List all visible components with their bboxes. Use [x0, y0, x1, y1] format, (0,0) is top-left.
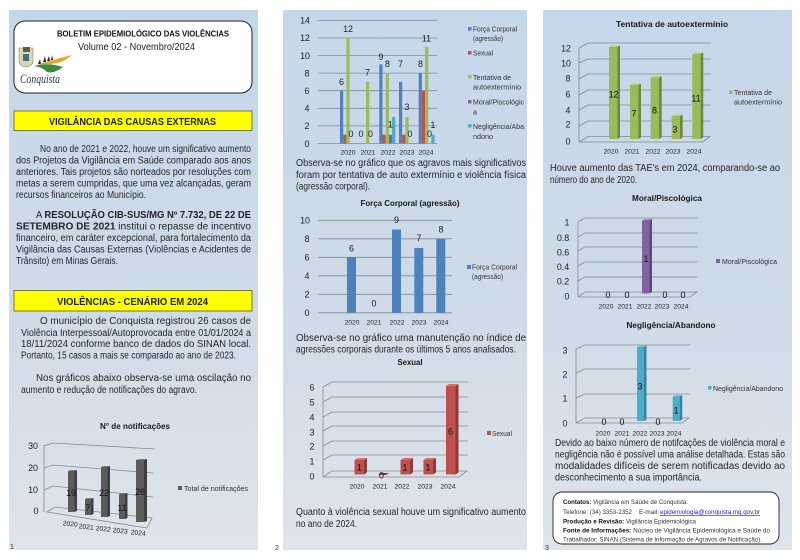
chart: agravos grouped bars: 1 — [388, 120, 393, 130]
chart: força corporal: 4 — [305, 271, 310, 281]
chart: sexual: 0 — [379, 470, 384, 480]
chart: negligência: 3 — [638, 382, 643, 392]
page number 3: 3 — [545, 545, 549, 552]
chart: negligência: 2 — [563, 370, 568, 380]
chart: tentativa: 7 — [632, 108, 637, 118]
chart: força corporal: 0 — [372, 298, 377, 308]
chart: moral: 0.4 — [557, 262, 569, 272]
chart: sexual: 2022 — [395, 484, 410, 490]
text block: oscilação — [21, 373, 251, 396]
chart: moral: 2024 — [674, 304, 689, 310]
text block: projetos: dos Projetos da Vigilância em Saúde comparado aos anos — [16, 156, 251, 166]
chart: agravos grouped bars: 2024 — [419, 150, 434, 156]
chart: total de notificações: 2020 — [62, 520, 78, 529]
chart: moral: 0.2 — [557, 276, 569, 286]
chart: agravos grouped bars — [300, 16, 524, 156]
text block: TAE: Houve aumento das TAE's em 2024, comparando-se ao — [550, 163, 780, 174]
legend: agravos: Força Corporal — [473, 24, 517, 34]
text block: projetos: recursos financeiros ao Município. — [16, 190, 146, 201]
text block: resolução — [16, 210, 252, 267]
chart: negligência: 0 — [656, 417, 661, 427]
chart: negligência: 2020 — [596, 430, 611, 438]
chart: sexual: 3 — [310, 428, 315, 438]
text block: projetos: anteriores. Tais projetos são norteados por resoluções com — [16, 167, 251, 178]
legend: agravos: (agressão) — [473, 34, 503, 43]
legend: agravos: Moral/Piscológic — [473, 98, 524, 106]
legend: sexual: Sexual — [492, 429, 512, 438]
chart: negligência: 1 — [563, 394, 568, 404]
text block: agravos: (agressão corporal). — [296, 182, 370, 192]
chart: negligência: 2024 — [667, 430, 682, 438]
chart: agravos grouped bars: 8 — [305, 68, 310, 78]
chart: agravos grouped bars: 12 — [343, 24, 353, 34]
chart: total de notificações: 30 — [28, 441, 38, 451]
text block: TAE: número do ano de 2020. — [550, 175, 637, 186]
chart: total de notificações: 2022 — [95, 525, 111, 534]
legend: tentativa: Tentativa de — [734, 88, 772, 97]
page number 2: 2 — [275, 545, 279, 552]
chart: sexual — [310, 382, 512, 490]
chart: agravos grouped bars: 11 — [422, 34, 431, 44]
chart: moral: 0.6 — [557, 248, 569, 258]
text block: oscilação: Nos gráficos abaixo observa-se uma oscilação no — [36, 373, 251, 384]
chart: tentativa: 0 — [566, 136, 571, 146]
contact box: E-mail: — [639, 509, 659, 516]
text block: projetos: metas a serem cumpridas, que uma vez alcançadas, geram — [16, 178, 251, 190]
chart: força corporal: 2024 — [434, 320, 449, 326]
chart: força corporal: 2021 — [367, 320, 382, 326]
chart: total de notificações: 2021 — [78, 523, 94, 532]
text block: casos registrados — [21, 316, 252, 362]
text block: agravos: foram por tentativa de auto extermínio e violência física — [296, 170, 527, 181]
chart: agravos grouped bars: 10 — [300, 51, 310, 61]
heading: Vigilância das causas externas — [14, 111, 252, 130]
chart: sexual: 2023 — [418, 484, 433, 490]
chart: moral — [557, 218, 777, 310]
text block: resolução: SETEMBRO DE 2021 institui o repasse de incentivo — [16, 222, 251, 232]
chart: negligência: 0 — [563, 418, 568, 428]
chart: força corporal: 2022 — [390, 320, 405, 326]
legend: agravos: Sexual — [473, 48, 493, 58]
chart: tentativa: 6 — [566, 90, 571, 100]
text block: projetos: No ano de 2021 e 2022, houve um significativo aumento — [40, 144, 251, 155]
text block: resolução: Vigilância das Causas Externas (Violências e Acidentes de — [16, 244, 251, 256]
chart title: moral: Moral/Piscológica — [632, 193, 702, 203]
chart: agravos grouped bars: 0 — [408, 129, 413, 139]
chart: negligência: 2023 — [650, 430, 665, 438]
icon: Conquista logo: Conquista — [20, 72, 60, 86]
chart: moral: 2020 — [599, 304, 614, 310]
chart: tentativa: 8 — [566, 74, 571, 84]
text block: casos registrados: O município de Conquista registrou 26 casos de — [40, 316, 251, 327]
text block: projetos — [16, 144, 251, 201]
text block: violência sexual — [296, 507, 526, 530]
chart: agravos grouped bars: 12 — [300, 33, 310, 43]
text block: agravos: Observa-se no gráfico que os agravos mais significativos — [296, 158, 526, 169]
text block: resolução: Trânsito) em Minas Gerais. — [16, 256, 118, 267]
text block: baixo número — [555, 438, 785, 484]
chart: total de notificações: 19 — [66, 488, 76, 498]
chart: sexual: 2020 — [350, 484, 365, 490]
chart: agravos grouped bars: 6 — [305, 86, 310, 96]
chart: moral: 1 — [565, 218, 570, 228]
chart: agravos grouped bars: 3 — [405, 102, 410, 112]
chart: sexual: 6 — [310, 382, 315, 392]
text block: casos registrados: Portanto, 15 casos a mais se comparado ao ano de 2023. — [21, 350, 236, 362]
chart: negligência: 0 — [620, 417, 625, 427]
chart: negligência: 1 — [674, 406, 679, 416]
contact box — [553, 492, 779, 544]
chart: força corporal: 0 — [305, 308, 310, 318]
text block: baixo número: desconhecimento a sua importância. — [555, 472, 702, 484]
text block: violência sexual: Quanto à violência sexual houve um significativo aumento — [296, 507, 526, 518]
header box — [14, 21, 252, 93]
chart: total de notificações: 10 — [28, 485, 38, 495]
heading: Violências cenário 2024: VIOLÊNCIAS - CENÁRIO EM 2024 — [57, 295, 208, 308]
legend: total: Total de notificações — [184, 484, 248, 493]
chart: força corporal: 10 — [300, 216, 310, 226]
chart: negligência: 3 — [563, 346, 568, 356]
chart: moral: 2023 — [655, 304, 670, 310]
chart: total de notificações: 11 — [117, 503, 127, 513]
icon: Conquista logo — [19, 47, 72, 86]
chart: agravos grouped bars: 8 — [385, 59, 390, 69]
chart: força corporal: 9 — [394, 215, 399, 225]
text block: oscilação: aumento e redução de notificações do agravo. — [21, 385, 197, 396]
chart: força corporal: 2023 — [412, 320, 427, 326]
text block: casos registrados: 18/11/2024 conforme banco de dados do SINAN local. — [21, 339, 251, 350]
chart: negligência — [563, 345, 783, 438]
chart: agravos grouped bars: 4 — [305, 104, 310, 114]
chart: total de notificações: 7 — [86, 503, 91, 513]
legend: tentativa — [729, 88, 782, 106]
chart title: notificações: N° de notificações — [100, 421, 170, 431]
chart: agravos grouped bars: 14 — [300, 16, 310, 26]
chart: sexual: 2021 — [373, 484, 388, 490]
chart: total de notificações: 0 — [34, 506, 39, 516]
contact box: Contatos: Vigilância em Saúde de Conquista: — [563, 499, 688, 506]
chart: moral: 0 — [681, 290, 686, 300]
chart: total de notificações — [28, 441, 155, 538]
chart: força corporal: 8 — [439, 224, 444, 234]
contact box: Produção e Revisão: Vigilância Epidemiológica — [563, 518, 696, 526]
contact box: Fonte de Informações: Núcleo de Vigilância Epidemiológica e Saúde do — [563, 528, 770, 534]
text block: manutenção: agressões corporais durante os últimos 5 anos analisados. — [296, 344, 516, 356]
chart: agravos grouped bars: 6 — [339, 77, 344, 87]
legend: agravos: autoextermínio — [473, 82, 521, 92]
chart title: tentativa: Tentativa de autoextermínio — [616, 19, 728, 29]
chart: sexual: 4 — [310, 412, 315, 422]
volume and date: Volume 02 - Novembro/2024 — [78, 42, 195, 53]
chart: tentativa: 10 — [561, 58, 571, 68]
chart: agravos grouped bars: 2023 — [400, 150, 415, 156]
chart title: força corporal: Força Corporal (agressão) — [360, 198, 460, 208]
chart: força corporal: 6 — [305, 252, 310, 262]
chart title: sexual: Sexual — [398, 357, 422, 367]
chart: tentativa: 3 — [673, 124, 678, 134]
legend: negligência: Negligência/Abandono — [713, 384, 783, 393]
chart: sexual: 1 — [426, 462, 431, 472]
chart: agravos grouped bars: 0 — [359, 129, 364, 139]
chart: tentativa: 2024 — [687, 148, 702, 156]
chart: moral: 0 — [663, 290, 668, 300]
text block: agravos — [296, 158, 527, 192]
chart: agravos grouped bars: 0 — [349, 129, 354, 139]
chart: tentativa: 2020 — [604, 148, 619, 156]
bulletin title: BOLETIM EPIDEMIOLÓGICO DAS VIOLÊNCIAS — [57, 28, 229, 38]
legend: força corporal: (agressão) — [472, 272, 503, 281]
heading: Violências cenário 2024 — [14, 290, 252, 311]
legend: força corporal — [467, 262, 517, 281]
legend: agravos: Negligência/Aba — [473, 122, 524, 131]
chart: sexual: 1 — [403, 462, 408, 472]
chart: tentativa: 8 — [652, 106, 657, 116]
legend: agravos — [468, 24, 524, 141]
text block: resolução: A RESOLUÇÃO CIB-SUS/MG Nº 7.732, DE 22 DE — [36, 210, 252, 221]
chart: agravos grouped bars: 9 — [379, 52, 384, 62]
text block: manutenção — [296, 333, 526, 356]
chart: tentativa — [561, 43, 782, 156]
chart: agravos grouped bars: 2022 — [381, 150, 396, 156]
chart: sexual: 1 — [310, 456, 315, 466]
chart: total de notificações: 22 — [99, 488, 109, 498]
chart: moral: 0 — [625, 290, 630, 300]
chart: negligência: 2022 — [633, 430, 648, 438]
chart: força corporal: 6 — [349, 244, 354, 254]
chart: total de notificações: 2024 — [130, 529, 146, 538]
legend: agravos: a — [473, 108, 477, 116]
chart: moral: 0 — [606, 290, 611, 300]
chart: sexual: 6 — [448, 426, 453, 436]
text block: resolução: financeiro, em caráter excepcional, para fortalecimento da — [16, 233, 252, 244]
legend: agravos: ndono — [473, 132, 493, 141]
chart: tentativa: 2022 — [646, 148, 661, 156]
chart: força corporal: 7 — [417, 233, 422, 243]
chart: moral: 1 — [644, 254, 649, 264]
chart: agravos grouped bars: 7 — [398, 59, 403, 69]
chart: negligência: 0 — [602, 417, 607, 427]
legend: moral: Moral/Piscológica — [722, 257, 777, 266]
chart: tentativa: 4 — [566, 106, 571, 116]
chart: agravos grouped bars: 0 — [427, 129, 432, 139]
chart: total de notificações: 2023 — [112, 527, 128, 536]
chart: moral: 2021 — [618, 304, 633, 310]
contact box: Telefone: (34) 3353-2352 — [563, 509, 632, 516]
panel: page 1 — [9, 10, 258, 550]
chart: agravos grouped bars: 1 — [431, 120, 436, 130]
chart: tentativa: 2 — [566, 120, 571, 130]
chart: total de notificações: 20 — [28, 463, 38, 473]
chart: moral: 2022 — [637, 304, 652, 310]
chart: tentativa: 2021 — [625, 148, 640, 156]
text block: baixo número: modalidades difíceis de serem notificadas devido ao — [555, 461, 785, 472]
legend: agravos: Tentativa de — [473, 73, 511, 82]
chart: agravos grouped bars: 2021 — [361, 150, 376, 156]
chart: negligência: 2021 — [615, 430, 630, 438]
legend: tentativa: autoextermínio — [734, 98, 782, 106]
panel: page 2 — [283, 10, 527, 550]
chart: força corporal: 8 — [305, 234, 310, 244]
chart: tentativa: 11 — [691, 94, 701, 104]
chart: sexual: 0 — [310, 472, 315, 482]
text block: casos registrados: Violência Interpessoal/Autoprovocada entre 01/01/2024 a — [21, 328, 252, 339]
chart: moral: 0 — [565, 292, 570, 302]
chart: agravos grouped bars: 2 — [305, 121, 310, 131]
chart: força corporal: 2 — [305, 290, 310, 300]
chart: total de notificações: 26 — [135, 487, 145, 497]
contact email link: epidemiologia@conquista.mg.gov.br — [660, 509, 761, 516]
chart: agravos grouped bars: 2020 — [341, 150, 356, 156]
chart title: negligência: Negligência/Abandono — [626, 320, 716, 330]
chart: sexual: 5 — [310, 398, 315, 408]
legend: força corporal: Força Corporal — [472, 262, 517, 272]
chart: força corporal — [300, 215, 517, 326]
chart: tentativa: 12 — [609, 90, 618, 100]
chart: sexual: 2 — [310, 442, 315, 452]
heading: Vigilância das causas externas: VIGILÂNCIA DAS CAUSAS EXTERNAS — [49, 115, 216, 128]
chart: agravos grouped bars: 0 — [305, 139, 310, 149]
panel: page 3 — [543, 10, 792, 550]
chart: moral: 0.8 — [557, 233, 569, 243]
chart: força corporal: 2020 — [345, 320, 360, 326]
text block: violência sexual: no ano de 2024. — [296, 519, 357, 530]
text block: TAE — [550, 163, 780, 186]
page number 1: 1 — [10, 544, 14, 551]
chart: agravos grouped bars: 0 — [368, 129, 373, 139]
chart: sexual: 1 — [357, 462, 362, 472]
chart: agravos grouped bars: 7 — [365, 68, 370, 78]
chart: tentativa: 12 — [561, 44, 571, 54]
chart: tentativa: 2023 — [666, 148, 681, 156]
text block: manutenção: Observa-se no gráfico uma manutenção no índice de — [296, 333, 526, 344]
chart: agravos grouped bars: 8 — [418, 59, 423, 69]
contact box: Trabalhador; SINAN (Sistema de Informação de Agravos de Notificação). — [563, 536, 762, 544]
chart: sexual: 2024 — [441, 484, 456, 490]
